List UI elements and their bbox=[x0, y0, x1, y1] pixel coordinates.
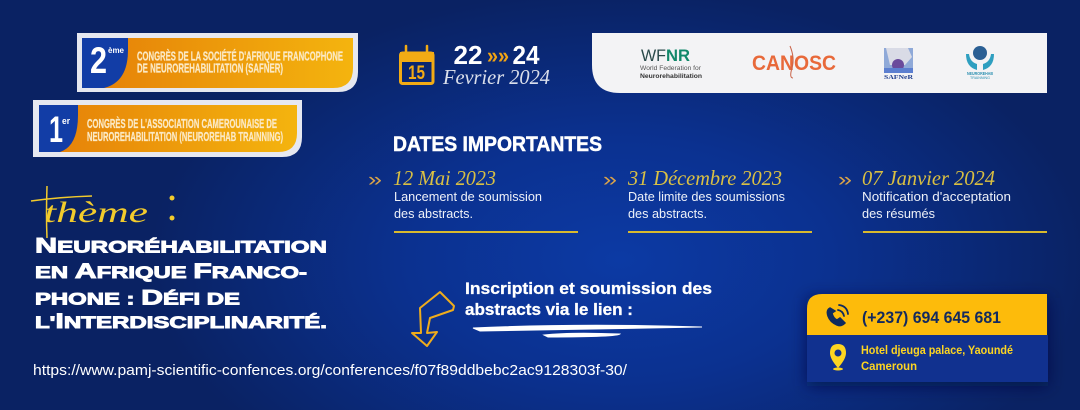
chevrons: » bbox=[603, 170, 617, 191]
month and year: Fevrier 2024 bbox=[442, 65, 550, 89]
description: Lancement de soumission bbox=[394, 189, 542, 204]
panel: partner logos bbox=[592, 33, 1047, 93]
chevrons: » bbox=[368, 170, 382, 191]
theme label: thème bbox=[44, 196, 148, 229]
icon: calendar: 15 bbox=[408, 63, 425, 84]
logo: Neurorehab Training bbox=[966, 46, 994, 80]
icon: calendar bbox=[400, 46, 434, 84]
date: 31 Décembre 2023 bbox=[627, 166, 782, 190]
logo: Neurorehab Training: NEUROREHAB bbox=[967, 71, 994, 76]
date: 07 Janvier 2024 bbox=[862, 166, 995, 190]
address: Hotel djeuga palace, Yaoundé bbox=[861, 343, 1013, 357]
superscript eme: ème bbox=[108, 46, 125, 55]
logo: CANOSC: CANOSC bbox=[752, 52, 836, 75]
theme title: EN A FRIQUE F RANCO- bbox=[35, 260, 307, 283]
icon: arrow down bbox=[412, 292, 454, 346]
registration link: https://www.pamj-scientific-confences.org/conferences/f07f89ddbebc2ac9128303f-30/ bbox=[33, 362, 628, 379]
icon: phone bbox=[827, 305, 848, 326]
logo: WFNR: World Federation for bbox=[640, 65, 702, 72]
date item 1 bbox=[368, 166, 578, 233]
theme label bbox=[31, 186, 174, 238]
logo: CANOSC bbox=[752, 46, 836, 78]
banner title text: DE NEUROREHABILITATION (SAFNER) bbox=[137, 62, 283, 76]
banner title text: CONGRÈS DE L'ASSOCIATION CAMEROUNAISE DE bbox=[87, 116, 277, 131]
chevrons: » bbox=[838, 170, 852, 191]
event dates bbox=[442, 40, 550, 89]
underline bbox=[863, 231, 1047, 233]
registration text: Inscription et soumission des bbox=[465, 280, 712, 298]
day numbers: 22 bbox=[454, 40, 482, 70]
heading: dates importantes: DATES IMPORTANTES bbox=[393, 133, 602, 156]
theme title: L' INTERDISCIPLINARITÉ. bbox=[35, 310, 327, 333]
underline bbox=[628, 231, 812, 233]
address: Cameroun bbox=[861, 359, 917, 373]
day numbers: 24 bbox=[512, 40, 540, 70]
theme title bbox=[35, 234, 327, 333]
orange chevrons: »» bbox=[487, 43, 509, 68]
logo: SAFNER: SAFNeR bbox=[884, 75, 914, 81]
banner: 2eme congres bbox=[77, 33, 358, 92]
superscript er: er bbox=[62, 116, 70, 126]
location bar bbox=[807, 335, 1048, 382]
description: Notification d'acceptation bbox=[862, 189, 1011, 204]
date: 12 Mai 2023 bbox=[393, 166, 496, 190]
logo: Neurorehab Training: TRAINNING bbox=[970, 76, 990, 80]
description: des abstracts. bbox=[394, 206, 473, 221]
logo: WFNR: Neurorehabilitation bbox=[640, 73, 702, 80]
description: des abstracts. bbox=[628, 206, 707, 221]
banner title text: NEUROREHABILITATION (NEUROREHAB TRAINNING) bbox=[87, 130, 283, 144]
banner title text: CONGRÈS DE LA SOCIÉTÉ D'AFRIQUE FRANCOPHONE bbox=[137, 48, 343, 64]
logo: WFNR: NR bbox=[666, 46, 690, 65]
icon: location pin bbox=[830, 344, 846, 370]
logo: WFNR bbox=[640, 46, 702, 80]
logo: SAFNER bbox=[884, 48, 914, 81]
underline bbox=[394, 231, 578, 233]
banner: 1er congres bbox=[33, 100, 302, 157]
brush underline bbox=[473, 325, 702, 337]
date item 2 bbox=[603, 166, 812, 233]
date item 3 bbox=[838, 166, 1047, 233]
theme title: N EURORÉHABILITATION bbox=[35, 234, 327, 258]
description: Date limite des soumissions bbox=[628, 189, 785, 204]
colon bbox=[170, 196, 174, 200]
numeral 2: 2 bbox=[90, 40, 107, 81]
description: des résumés bbox=[862, 206, 935, 221]
logo: WFNR: WF bbox=[641, 46, 666, 65]
registration text: abstracts via le lien : bbox=[465, 301, 633, 319]
phone bar bbox=[807, 294, 1047, 335]
numeral 1: 1 bbox=[49, 109, 63, 150]
phone number: (+237) 694 645 681 bbox=[862, 308, 1001, 327]
theme title: PHONE : D ÉFI DE bbox=[35, 286, 240, 310]
panel: contact bbox=[807, 294, 1048, 386]
registration text bbox=[465, 280, 712, 337]
